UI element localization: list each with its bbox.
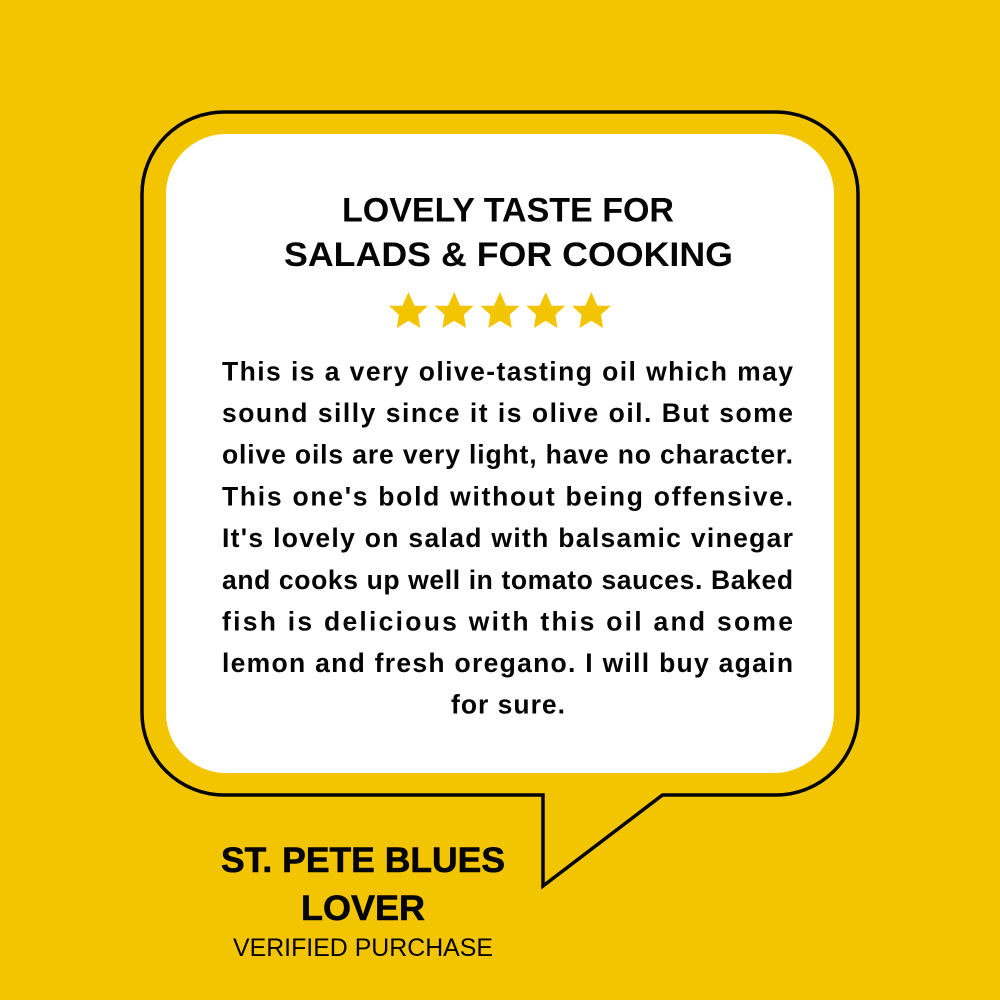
- review body text: sound silly since it is olive oil. But some: [222, 398, 793, 428]
- reviewer name: LOVER: [301, 889, 425, 928]
- white review panel: [166, 134, 834, 773]
- heading: LOVELY TASTE FOR: [342, 192, 674, 230]
- review body text: and cooks up well in tomato sauces. Baked: [222, 565, 793, 595]
- heading: [284, 192, 733, 274]
- reviewer name: [221, 841, 505, 928]
- speech bubble outline with tail: [142, 112, 858, 886]
- reviewer name: ST. PETE BLUES: [221, 841, 505, 880]
- five star rating: [389, 292, 611, 328]
- verified purchase label: VERIFIED PURCHASE: [233, 934, 493, 962]
- review body text: [222, 356, 793, 720]
- review body text: lemon and fresh oregano. I will buy again: [222, 648, 793, 678]
- review body text: fish is delicious with this oil and some: [222, 606, 793, 636]
- review body text: It's lovely on salad with balsamic vinegar: [222, 523, 793, 553]
- review body text: This one's bold without being offensive.: [222, 482, 793, 512]
- heading: SALADS & FOR COOKING: [284, 236, 733, 274]
- review body text: olive oils are very light, have no character.: [222, 440, 793, 470]
- review body text: for sure.: [451, 690, 565, 720]
- review body text: This is a very olive-tasting oil which may: [222, 356, 793, 386]
